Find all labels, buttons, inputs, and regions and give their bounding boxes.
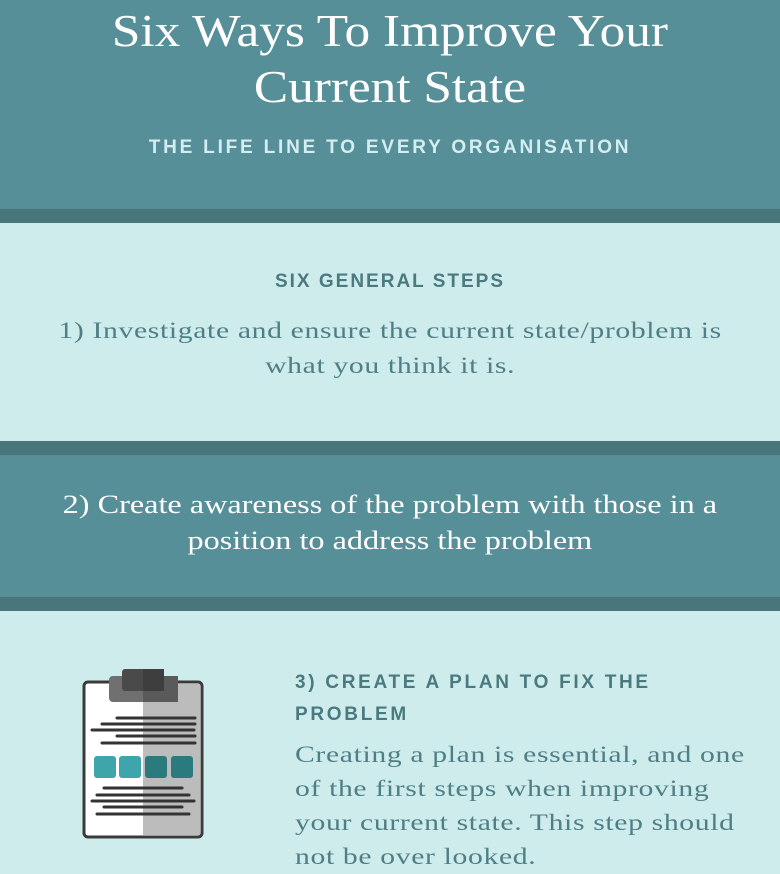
text: step 2 <box>63 490 717 555</box>
panel: step 3 <box>0 611 780 871</box>
heading: six general steps: SIX GENERAL STEPS <box>275 271 505 292</box>
text: step 3: not be over looked. <box>295 844 536 869</box>
panel: step 1 <box>0 223 780 441</box>
text: step 1: what you think it is. <box>265 353 515 378</box>
text: step 3: of the first steps when improving <box>295 776 709 801</box>
heading: step 3: PROBLEM <box>295 704 409 725</box>
text: step 3 <box>295 742 745 869</box>
subtitle: THE LIFE LINE TO EVERY ORGANISATION <box>149 137 631 158</box>
title <box>112 6 668 112</box>
text: step 3: Creating a plan is essential, and one <box>295 742 745 767</box>
icon: clipboard <box>82 669 204 838</box>
title: Current State <box>254 62 526 112</box>
text: step 2: 2) Create awareness of the problem with those in a <box>63 490 717 519</box>
heading: step 3 <box>295 672 651 725</box>
heading: step 3: 3) CREATE A PLAN TO FIX THE <box>295 672 651 693</box>
title: Six Ways To Improve Your <box>112 6 668 56</box>
text: step 1 <box>58 318 722 378</box>
text: step 1: 1) Investigate and ensure the current state/problem is <box>58 318 722 343</box>
header panel <box>0 0 780 209</box>
text: step 3: your current state. This step should <box>295 810 735 835</box>
panel: step 2 <box>0 455 780 597</box>
text: step 2: position to address the problem <box>188 526 592 555</box>
